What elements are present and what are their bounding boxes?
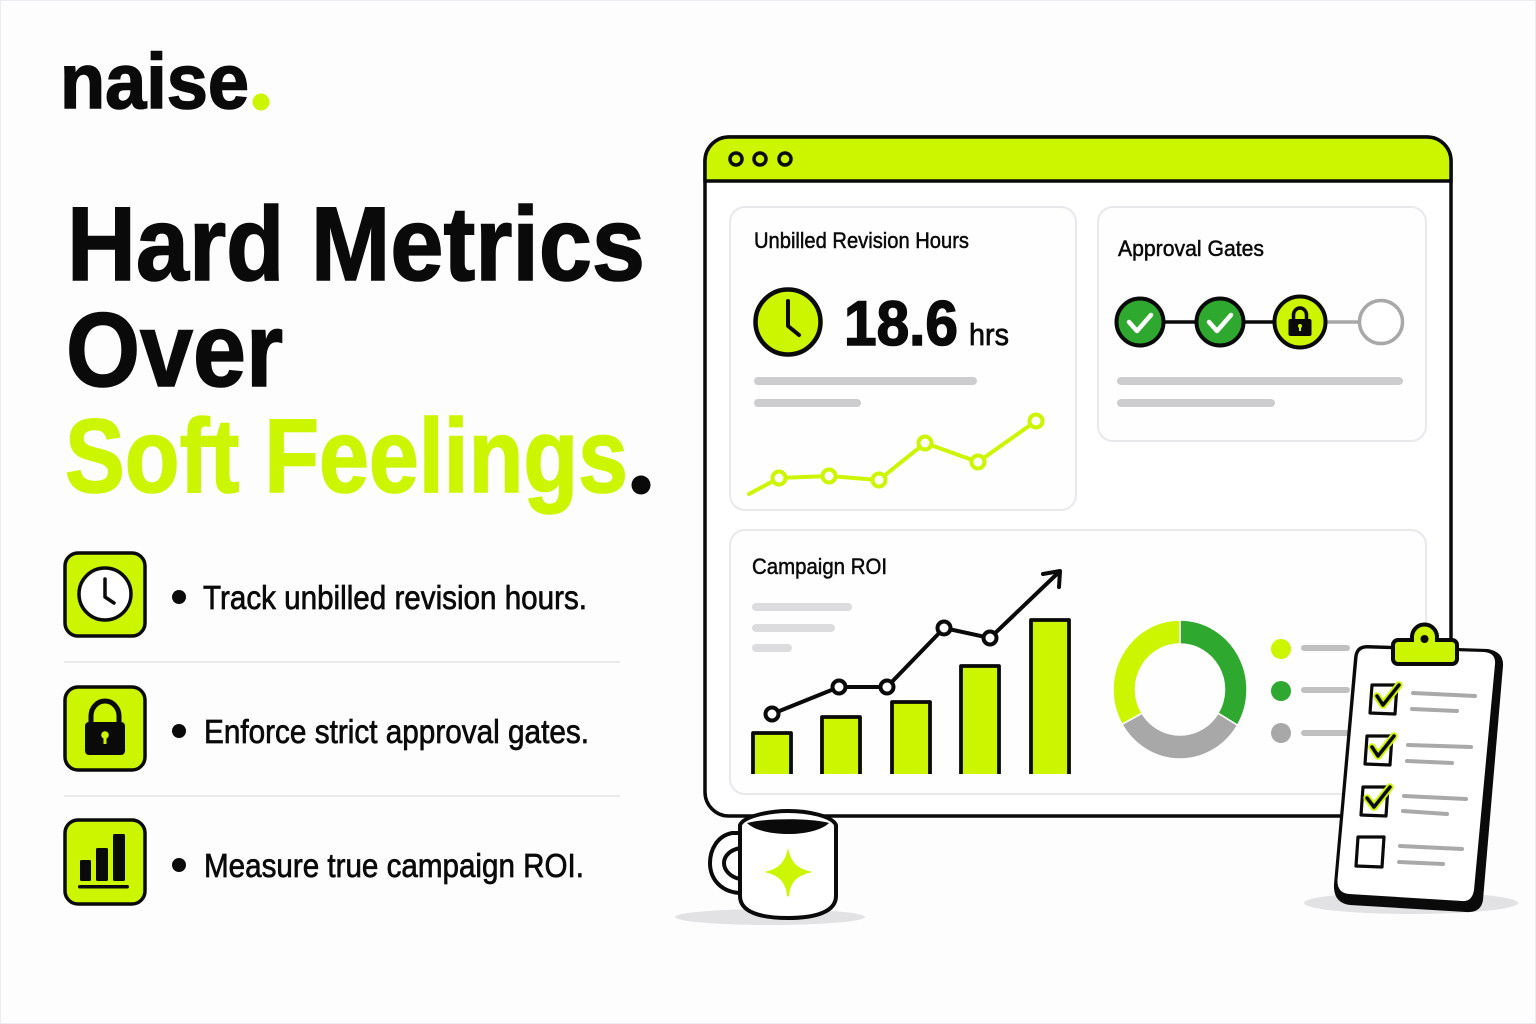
check marks bbox=[1367, 685, 1399, 807]
icon: bar chart bbox=[65, 820, 145, 904]
icon: coffee mug bbox=[675, 811, 865, 925]
metric value: 18.6 bbox=[844, 289, 958, 359]
clipboard body bbox=[1334, 645, 1503, 912]
panel: unbilled revision hours bbox=[730, 207, 1076, 510]
checklist lines bbox=[1399, 693, 1475, 864]
approval steps bbox=[1116, 296, 1402, 348]
card heading: Campaign ROI bbox=[752, 554, 887, 579]
panel: browser window bbox=[705, 137, 1451, 816]
trend line with arrow bbox=[766, 571, 1060, 720]
card heading: Unbilled Revision Hours bbox=[754, 228, 969, 253]
title: Hard Metrics bbox=[67, 186, 645, 303]
title: Over bbox=[66, 292, 283, 409]
bar chart bbox=[753, 620, 1069, 774]
logo: naise: naise bbox=[60, 37, 249, 125]
window title bar bbox=[705, 137, 1451, 181]
panel: approval gates bbox=[1098, 207, 1426, 441]
donut legend bbox=[1271, 639, 1350, 743]
card heading: Approval Gates bbox=[1118, 236, 1264, 261]
list item: unbilled hours bbox=[65, 553, 587, 636]
list item: approval gates bbox=[65, 687, 589, 770]
list item: campaign ROI bbox=[65, 820, 584, 904]
list item: approval gates: Enforce strict approval gates. bbox=[204, 713, 589, 750]
icon: lock bbox=[65, 687, 145, 770]
icon: clipboard checklist bbox=[1304, 624, 1518, 914]
metric value: hrs bbox=[969, 317, 1009, 352]
sparkline bbox=[749, 414, 1042, 494]
clipboard clip bbox=[1393, 624, 1457, 664]
list item: campaign ROI: Measure true campaign ROI. bbox=[204, 847, 584, 884]
icon: clock badge bbox=[756, 290, 820, 354]
icon: clock bbox=[65, 553, 145, 636]
list item: unbilled hours: Track unbilled revision hours. bbox=[203, 579, 587, 616]
donut chart bbox=[1113, 620, 1247, 759]
checklist boxes bbox=[1356, 685, 1397, 867]
title: Soft Feelings bbox=[65, 398, 628, 515]
panel: campaign ROI bbox=[730, 530, 1426, 794]
title bbox=[65, 186, 650, 515]
